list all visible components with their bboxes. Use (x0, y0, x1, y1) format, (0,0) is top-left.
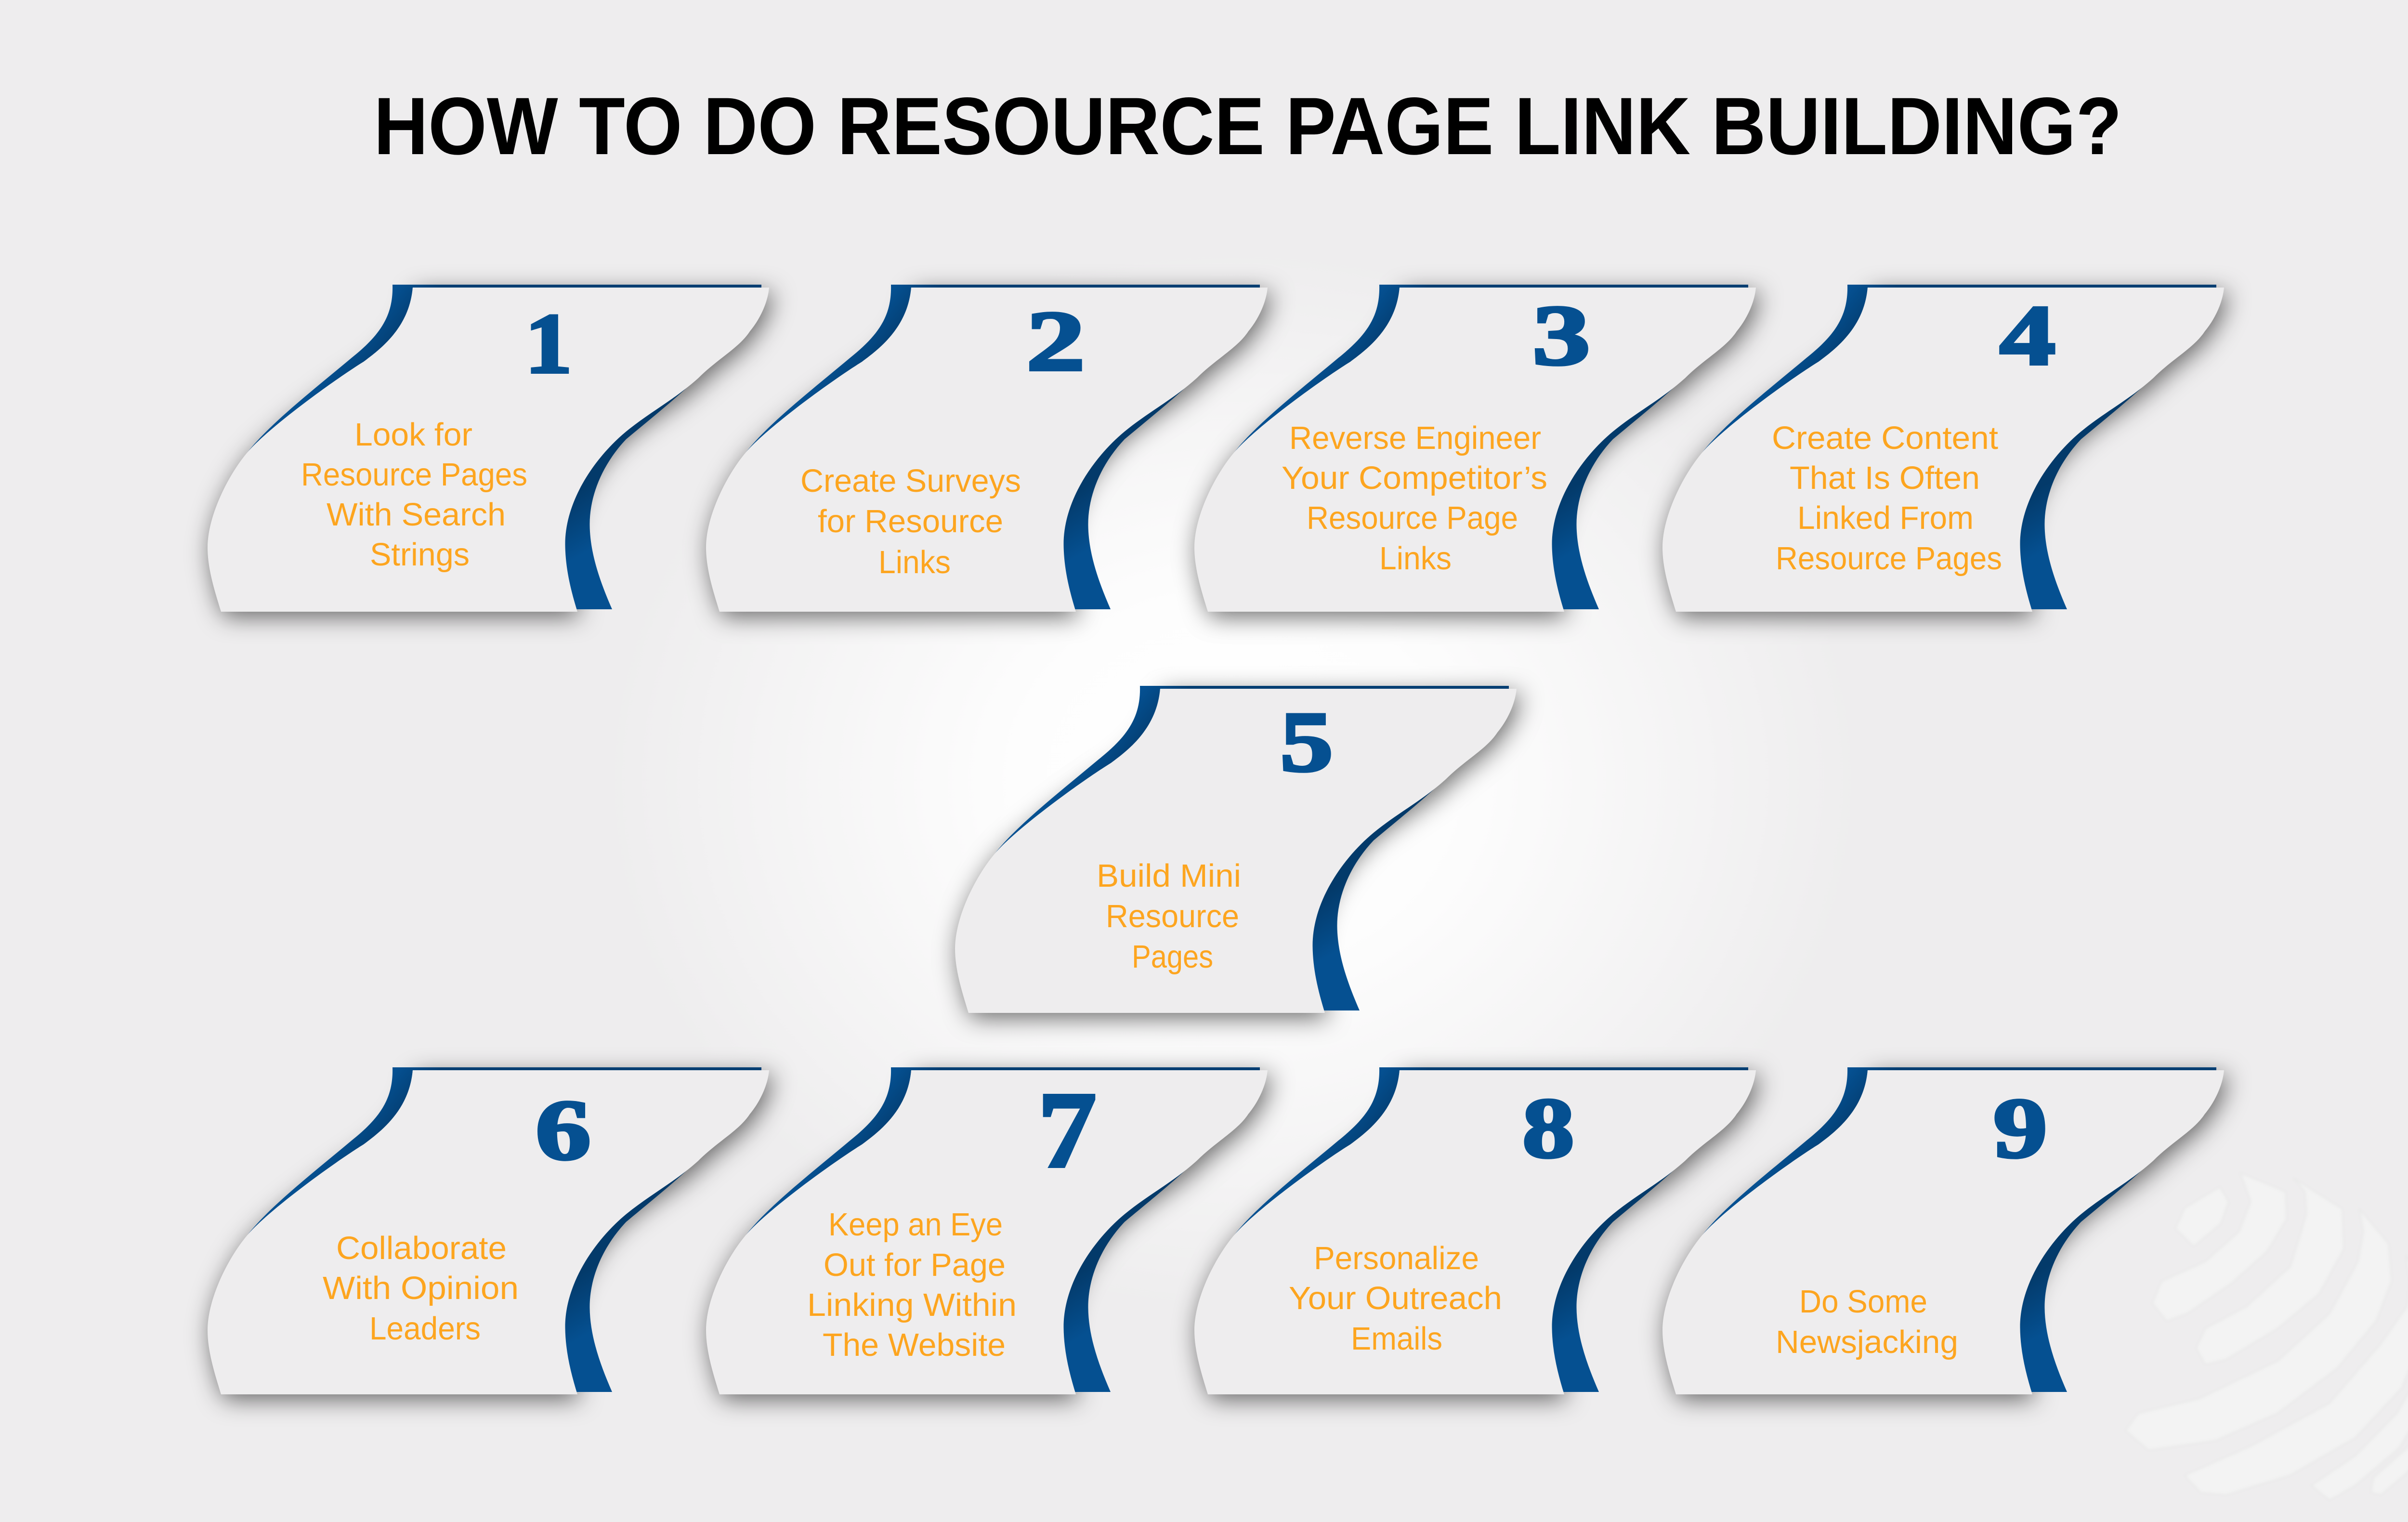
text: step 2 label (800, 463, 1021, 580)
text: step 3 label (1282, 420, 1547, 577)
text: step 7 label: The Website (823, 1327, 1006, 1363)
text: step 3 label: Links (1379, 540, 1452, 577)
panel: step 4 (1662, 285, 2227, 617)
text: step 7 label: Linking Within (807, 1287, 1017, 1323)
text: step 3 label: Reverse Engineer (1289, 420, 1541, 456)
text: step 8 label (1289, 1240, 1502, 1357)
text: step 5 label: Build Mini (1097, 858, 1241, 894)
number 2: 2 (1026, 293, 1085, 389)
card shape 1 (208, 285, 772, 617)
text: step 5 label (1097, 858, 1241, 975)
text: step 8 label: Personalize (1314, 1240, 1479, 1276)
text: step 4 label: That Is Often (1790, 460, 1980, 496)
number 4: 4 (2000, 288, 2055, 383)
text: step 9 label: Do Some (1799, 1284, 1927, 1320)
text: step 2 label: Links (878, 544, 951, 580)
text: step 3 label: Your Competitor’s (1282, 460, 1547, 496)
text: step 8 label: Emails (1351, 1321, 1442, 1357)
text: step 6 label: Collaborate (336, 1230, 507, 1266)
panel: step 5 (955, 686, 1520, 1018)
card shape 2 (706, 285, 1271, 617)
text: step 4 label: Linked From (1797, 500, 1974, 536)
text: step 5 label: Resource (1106, 898, 1239, 934)
text: step 1 label: Look for (354, 417, 472, 453)
card shape 5 (955, 686, 1520, 1018)
text: step 8 label: Your Outreach (1289, 1280, 1502, 1316)
panel: step 9 (1662, 1067, 2227, 1399)
watermark: globe logo (2125, 1173, 2408, 1500)
number 9: 9 (1993, 1080, 2047, 1176)
title: HOW TO DO RESOURCE PAGE LINK BUILDING? (374, 80, 2122, 171)
card shape 7 (706, 1067, 1271, 1399)
text: step 7 label: Out for Page (824, 1247, 1006, 1283)
card shape 6 (208, 1067, 772, 1399)
text: step 4 label: Resource Pages (1776, 540, 2002, 577)
card shape 4 (1662, 285, 2227, 617)
card shape 3 (1194, 285, 1759, 617)
text: step 6 label: Leaders (369, 1311, 481, 1347)
number 7: 7 (1038, 1070, 1097, 1190)
text: step 1 label: Strings (370, 537, 470, 573)
panel: step 6 (208, 1067, 772, 1399)
card shape 9 (1662, 1067, 2227, 1399)
text: step 4 label: Create Content (1772, 420, 1998, 456)
text: step 2 label: for Resource (818, 503, 1003, 539)
number 6: 6 (536, 1082, 591, 1178)
text: step 7 label: Keep an Eye (828, 1207, 1003, 1243)
text: step 2 label: Create Surveys (800, 463, 1021, 499)
panel: step 3 (1194, 285, 1759, 617)
text: step 6 label: With Opinion (323, 1270, 519, 1306)
text: step 1 label: With Search (327, 497, 506, 533)
panel: step 1 (208, 285, 772, 617)
text: step 3 label: Resource Page (1307, 500, 1518, 536)
text: step 7 label (807, 1207, 1017, 1363)
number 8: 8 (1522, 1080, 1574, 1176)
card shape 8 (1194, 1067, 1759, 1399)
number 5: 5 (1280, 694, 1333, 789)
number 1: 1 (525, 296, 572, 391)
text: step 9 label: Newsjacking (1776, 1324, 1958, 1360)
text: step 1 label: Resource Pages (301, 457, 527, 493)
panel: step 7 (706, 1067, 1271, 1399)
number 3: 3 (1532, 288, 1590, 383)
text: step 6 label (323, 1230, 519, 1347)
panel: step 2 (706, 285, 1271, 617)
text: step 4 label (1772, 420, 2002, 577)
text: step 9 label (1776, 1284, 1958, 1360)
text: step 5 label: Pages (1132, 939, 1213, 975)
panel: step 8 (1194, 1067, 1759, 1399)
text: step 1 label (301, 417, 527, 573)
